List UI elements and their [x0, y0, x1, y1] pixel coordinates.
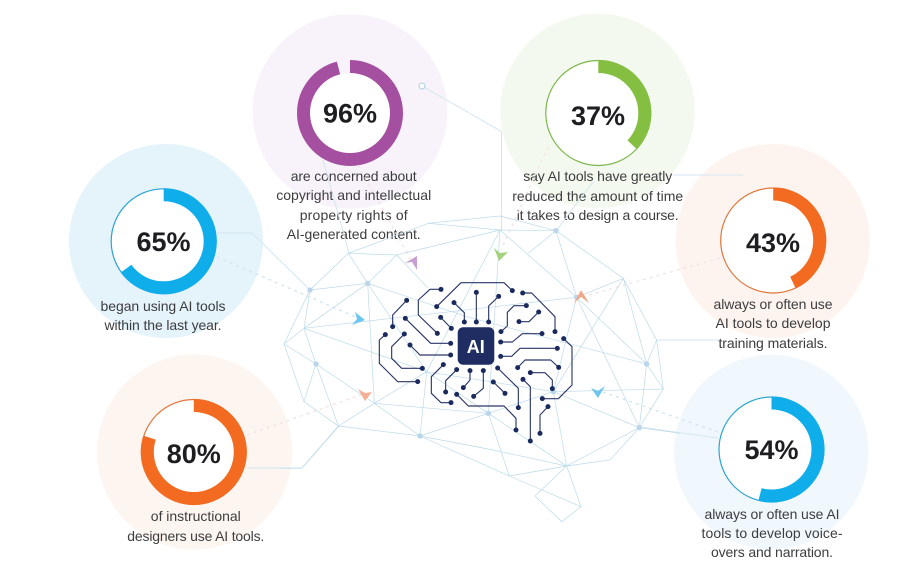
circuit traces: [379, 283, 572, 443]
panel: 43% training materials: AI tools to develop: [716, 315, 831, 331]
arrow: orange right: [574, 290, 589, 303]
panel: 80% of instructional designers: of instructional: [151, 508, 241, 524]
panel: 65% began using AI tools: [69, 144, 263, 338]
panel: 96% concerned about copyright: AI-generated content.: [287, 226, 421, 242]
panel: 37% reduced course design time: it takes to design a course.: [517, 207, 679, 223]
panel: 43% training materials: training materials.: [718, 335, 828, 351]
panel: 43% training materials: [676, 144, 870, 351]
panel: 54% voice-overs and narration: 54%: [744, 435, 799, 465]
panel: 65% began using AI tools: began using AI tools: [100, 298, 226, 314]
panel: 65% began using AI tools: 65%: [136, 227, 191, 257]
arrow: blue right: [591, 386, 605, 398]
panel: 96% concerned about copyright: 96%: [323, 98, 377, 128]
arrow: purple: [405, 256, 417, 270]
panel: 37% reduced course design time: say AI tools have greatly: [523, 168, 672, 184]
mesh nodes: [307, 228, 649, 439]
panel: 80% of instructional designers: designers use AI tools.: [127, 528, 264, 544]
panel: 80% of instructional designers: 80%: [167, 439, 221, 469]
panel: 54% voice-overs and narration: [674, 355, 869, 560]
panel: 80% of instructional designers: [97, 354, 292, 550]
panel: 43% training materials: 43%: [746, 228, 800, 258]
panel: 96% concerned about copyright: property rights of: [300, 207, 408, 223]
arrow: blue left: [352, 312, 365, 325]
arrow: peach left: [358, 389, 372, 401]
connector lines from panels to brain: [217, 83, 743, 468]
panel: 43% training materials: always or often use: [714, 296, 833, 312]
panel: 37% reduced course design time: [500, 14, 695, 223]
panel: 65% began using AI tools: within the last year.: [104, 317, 222, 333]
AI chip: AI: [467, 337, 485, 357]
panel: 54% voice-overs and narration: overs and narration.: [711, 544, 833, 560]
panel: 96% concerned about copyright: copyright and intellectual: [276, 187, 431, 203]
panel: 54% voice-overs and narration: always or often use AI: [704, 506, 840, 522]
panel: 96% concerned about copyright: [253, 14, 447, 242]
AI chip: [458, 327, 494, 365]
panel: 96% concerned about copyright: are concerned about: [291, 168, 417, 184]
panel: 54% voice-overs and narration: tools to develop voice-: [702, 525, 843, 541]
panel: 37% reduced course design time: reduced the amount of time: [512, 188, 683, 204]
panel: 37% reduced course design time: 37%: [571, 101, 625, 131]
arrow: green: [494, 248, 508, 261]
brain mesh network: [280, 216, 680, 522]
